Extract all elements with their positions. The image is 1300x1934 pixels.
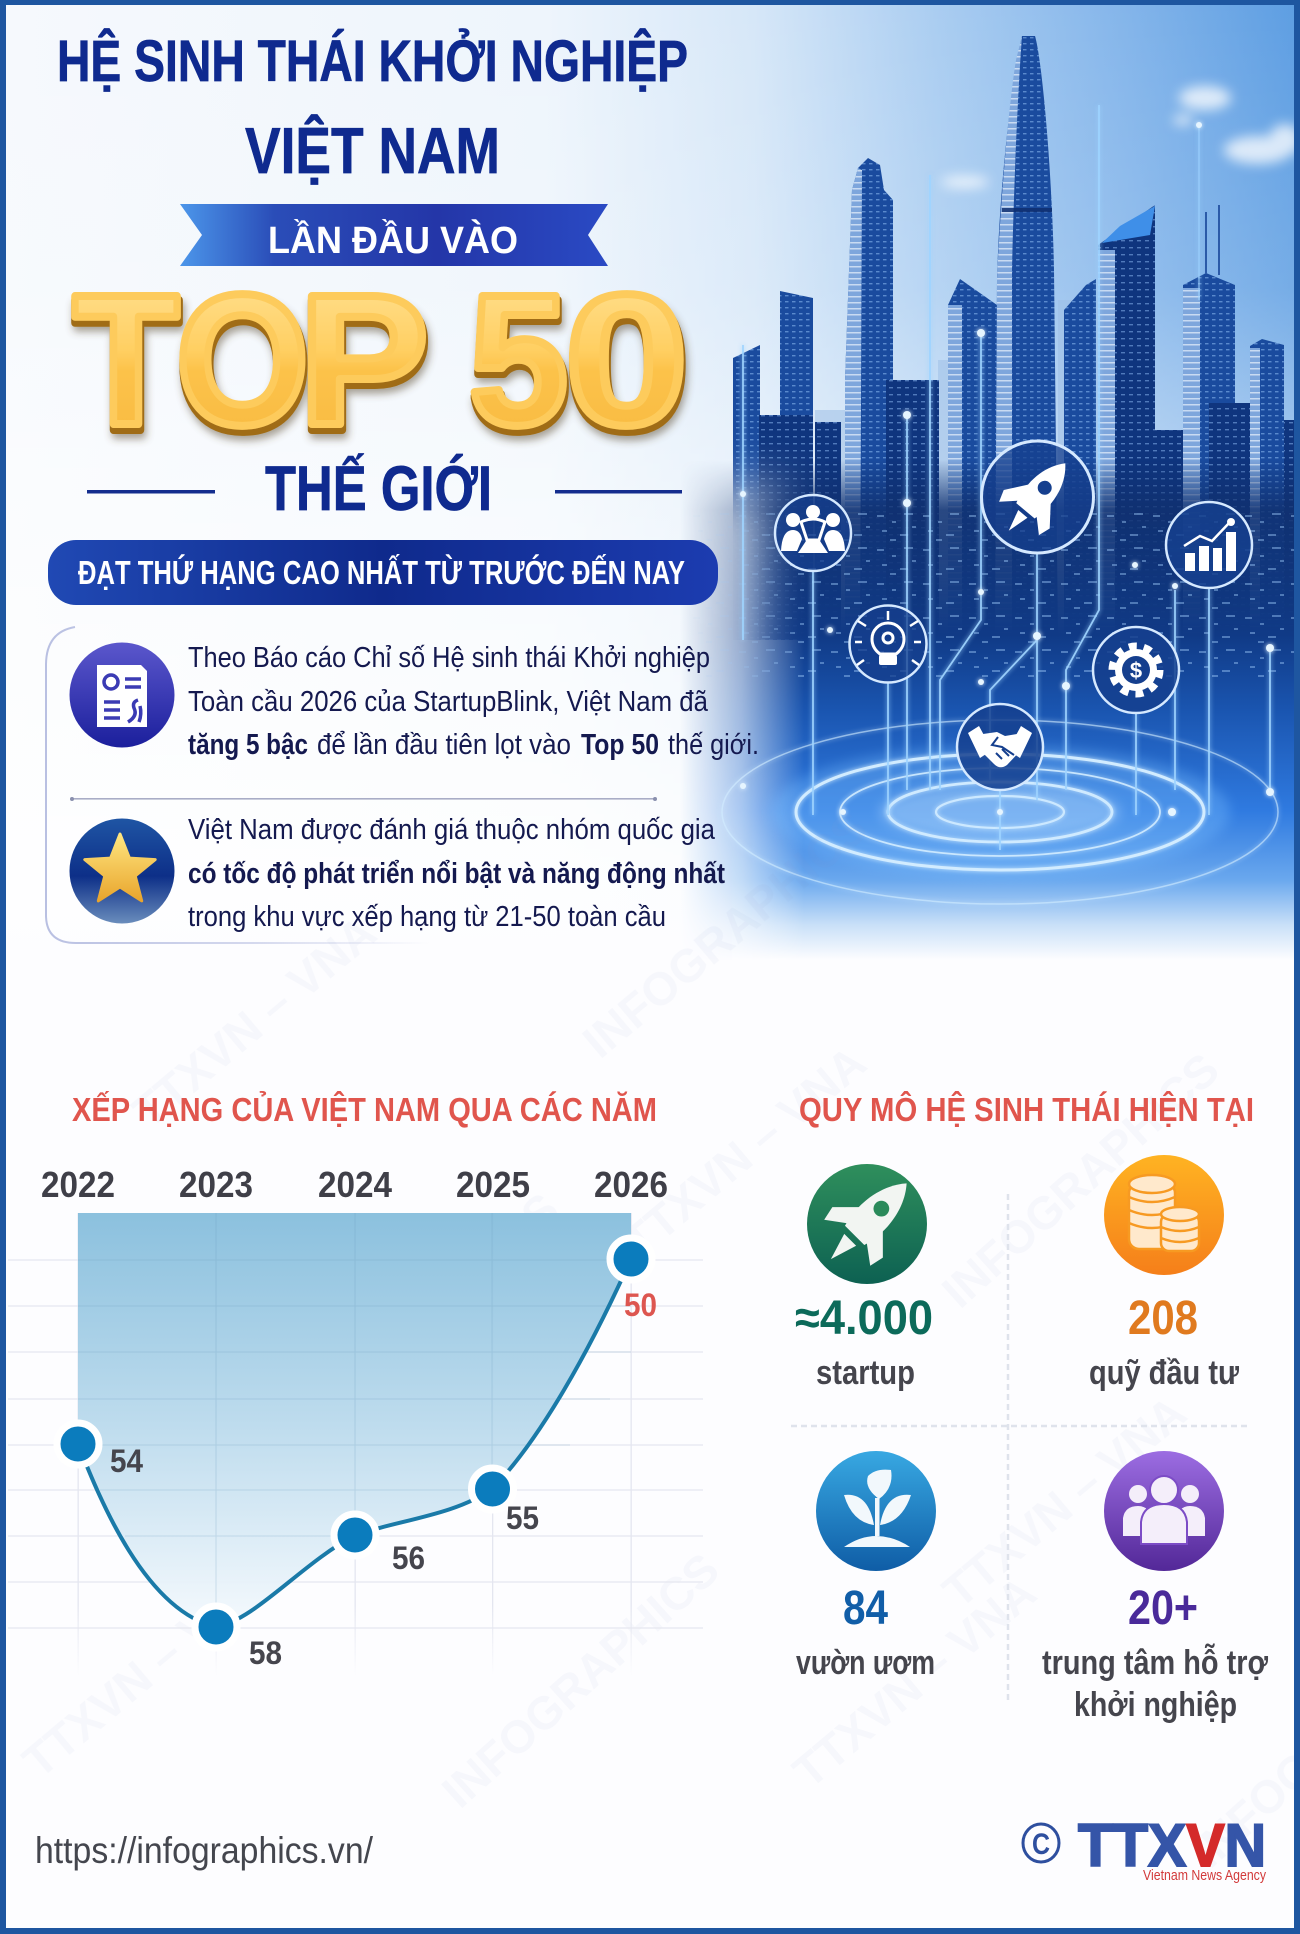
stat: support centres	[1042, 1451, 1269, 1724]
data labels: 54	[110, 1443, 143, 1479]
stat: startups: ≈4.000	[795, 1292, 933, 1345]
watermarks: TTXVN – VNA	[13, 1556, 276, 1788]
chart grid	[8, 1213, 703, 1675]
banner: highest rank	[48, 540, 718, 605]
trend line	[78, 1259, 631, 1627]
skyline buildings	[733, 36, 1294, 643]
watermarks: TTXVN – VNA	[613, 1036, 876, 1268]
area fill	[78, 1213, 631, 1627]
logo: TTXVN: C	[1032, 1828, 1050, 1861]
text: report finding: Theo Báo cáo Chỉ số Hệ sinh thái Khởi nghiệp	[188, 642, 710, 674]
stat: support centres: 20+	[1128, 1582, 1198, 1635]
watermarks: TTXVN – VNA	[933, 1386, 1196, 1618]
watermarks: TTXVN – VNA	[783, 1566, 1046, 1798]
text: report finding: thế giới.	[668, 729, 759, 761]
subtitle: world	[87, 453, 682, 524]
icon: gear with dollar: $	[1130, 658, 1142, 683]
circuit lines	[743, 105, 1270, 850]
watermarks: INFOGRAPHICS	[272, 1183, 569, 1457]
headline: gold TOP 50: 0	[565, 257, 688, 464]
line chart: ranking 2022-2026	[8, 1164, 703, 1675]
source url: https://infographics.vn/	[35, 1830, 374, 1871]
background: sky	[0, 0, 1300, 960]
stat: investment funds: quỹ đầu tư	[1089, 1354, 1239, 1392]
title: HỆ SINH THÁI KHỞI NGHIỆP	[57, 29, 688, 94]
text: report finding: Top 50	[581, 729, 659, 761]
data labels	[110, 1287, 657, 1671]
heading: ranking over the years: XẾP HẠNG CỦA VIỆT NAM QUA CÁC NĂM	[72, 1091, 657, 1129]
year labels: 2024	[318, 1164, 392, 1205]
stat: startups: startup	[816, 1354, 915, 1392]
text: report finding: tăng 5 bậc	[188, 729, 308, 761]
icon: handshake	[957, 704, 1043, 790]
year labels: 2023	[179, 1164, 253, 1205]
text: growth group: Việt Nam được đánh giá thuộc nhóm quốc gia	[188, 814, 716, 846]
stat: investment funds	[1089, 1155, 1239, 1392]
hero illustration: smart city skyline	[680, 36, 1300, 960]
headline: gold TOP 50: P	[299, 257, 425, 464]
year labels: 2025	[456, 1164, 530, 1205]
text: report finding: để lần đầu tiên lọt vào	[317, 729, 571, 761]
stat: investment funds: 208	[1128, 1292, 1198, 1345]
panel: key findings	[46, 627, 759, 943]
text: report finding: Toàn cầu 2026 của StartupBlink, Việt Nam đã	[188, 686, 709, 718]
icon: people	[775, 495, 851, 571]
stat: incubators: vườn ươm	[796, 1644, 935, 1682]
headline: gold TOP 50	[73, 257, 688, 464]
stat: incubators	[796, 1451, 936, 1682]
year labels: 2022	[41, 1164, 115, 1205]
icon: report document	[70, 642, 174, 748]
watermarks: TTXVN – VNA	[123, 906, 386, 1138]
stat: support centres: khởi nghiệp	[1074, 1686, 1237, 1724]
data labels: 58	[249, 1635, 282, 1671]
watermarks	[13, 801, 1300, 1877]
stat: support centres: trung tâm hỗ trợ	[1042, 1644, 1269, 1682]
watermarks: INFOGRAPHICS	[932, 1043, 1229, 1317]
headline: gold TOP 50: O	[176, 257, 309, 464]
logo: TTXVN: TTXVN	[1078, 1812, 1266, 1879]
text: growth group	[188, 814, 725, 933]
light rings	[770, 746, 1230, 878]
clouds	[941, 86, 1300, 188]
stat: startups	[795, 1158, 933, 1392]
subtitle: world: THẾ GIỚI	[265, 453, 492, 524]
ribbon: first time	[180, 204, 608, 266]
year labels	[41, 1164, 668, 1205]
city lights	[739, 513, 1294, 677]
icon: gear with dollar	[1093, 627, 1179, 713]
text: report finding	[188, 642, 759, 761]
text: growth group: trong khu vực xếp hạng từ 21-50 toàn cầu	[188, 901, 666, 933]
watermarks: INFOGRAPHICS	[573, 801, 877, 1068]
year labels: 2026	[594, 1164, 668, 1205]
stat: incubators: 84	[843, 1582, 888, 1635]
watermarks: INFOGRAPHICS	[432, 1543, 729, 1817]
banner: highest rank: ĐẠT THỨ HẠNG CAO NHẤT TỪ TRƯỚC ĐẾN NAY	[78, 554, 685, 592]
title	[57, 29, 688, 187]
icon: star	[70, 818, 174, 924]
ground glow	[680, 460, 1295, 960]
data points	[57, 1238, 652, 1648]
data labels: 50	[624, 1287, 657, 1323]
text: growth group: có tốc độ phát triển nổi bật và năng động nhất	[188, 858, 725, 890]
icon: light bulb	[850, 606, 926, 682]
icon: growth chart	[1166, 502, 1252, 588]
icon: rocket	[982, 441, 1094, 553]
data labels: 56	[392, 1540, 425, 1576]
light nodes	[740, 122, 1274, 816]
data labels: 55	[506, 1500, 539, 1536]
logo: TTXVN: Vietnam News Agency	[1143, 1868, 1267, 1884]
title: VIỆT NAM	[245, 114, 500, 187]
headline: gold TOP 50: T	[73, 257, 179, 464]
ribbon: first time: LẦN ĐẦU VÀO	[268, 218, 518, 262]
headline: gold TOP 50: 5	[469, 257, 568, 464]
